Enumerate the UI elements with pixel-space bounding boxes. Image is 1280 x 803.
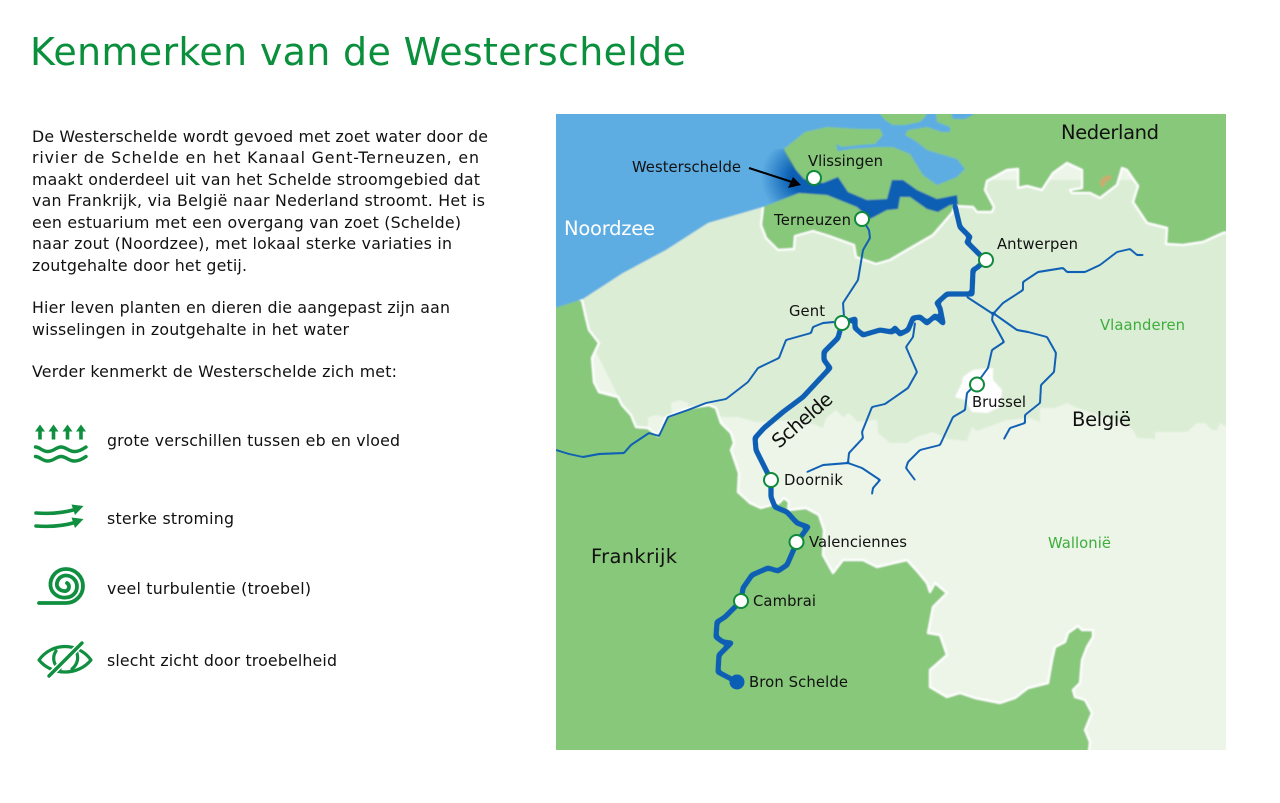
label: België: België <box>1072 408 1131 431</box>
label: Valenciennes: Valenciennes <box>809 534 907 551</box>
label: Schelde river: Schelde <box>767 388 837 453</box>
label: Antwerpen: Antwerpen <box>997 236 1078 253</box>
label: Terneuzen: Terneuzen <box>773 212 851 229</box>
marker: Gent <box>835 316 849 330</box>
marker: Bron Schelde <box>730 674 744 690</box>
label: Frankrijk: Frankrijk <box>591 545 678 568</box>
text block: list intro: Verder kenmerkt de Westerschelde zich met: <box>32 362 397 381</box>
label: current: sterke stroming <box>107 509 234 528</box>
text block: introduction: rivier de Schelde en het Kanaal Gent-Terneuzen, en <box>32 148 479 167</box>
text block: introduction: van Frankrijk, via België naar Nederland stroomt. Het is <box>32 191 485 210</box>
title: Kenmerken van de Westerschelde <box>30 30 686 74</box>
text block: introduction: maakt onderdeel uit van het Schelde stroomgebied dat <box>32 170 480 189</box>
text block: introduction: een estuarium met een overgang van zoet (Schelde) <box>32 213 461 232</box>
label: Doornik: Doornik <box>784 472 843 489</box>
map panel <box>556 114 1226 750</box>
icon: turbulence spiral <box>39 569 83 603</box>
estuary mouth gradient <box>764 149 800 202</box>
label: Bron Schelde: Bron Schelde <box>749 674 848 691</box>
marker: Valenciennes <box>790 535 804 549</box>
label: turbulence: veel turbulentie (troebel) <box>107 579 311 598</box>
icon: strong current <box>36 504 84 528</box>
text block: introduction: naar zout (Noordzee), met lokaal sterke variaties in <box>32 234 452 253</box>
label: poor visibility: slecht zicht door troebelheid <box>107 651 337 670</box>
label: Westerschelde: Westerschelde <box>632 159 741 176</box>
marker: Vlissingen <box>807 171 821 185</box>
river: Schelde <box>716 206 985 682</box>
thin rivers <box>556 219 1143 494</box>
label: Nederland: Nederland <box>1061 121 1159 144</box>
region: Frankrijk <box>556 298 1094 750</box>
sea: small inlet top <box>950 114 974 120</box>
text block: introduction: zoutgehalte door het getij. <box>32 256 247 275</box>
tan spot <box>1099 175 1112 188</box>
label: Cambrai: Cambrai <box>753 593 816 610</box>
icon: crossed-out eye <box>39 643 91 676</box>
text block: introduction: De Westerschelde wordt gevoed met zoet water door de <box>32 127 488 146</box>
marker: Doornik <box>764 473 778 487</box>
Wallonia patches <box>648 400 688 432</box>
Brussels urban area <box>955 368 1002 413</box>
marker: Antwerpen <box>979 253 993 267</box>
text block: introduction <box>32 127 488 275</box>
marker: Cambrai <box>734 594 748 608</box>
icon: tide arrows and waves <box>35 424 86 461</box>
label: tide: grote verschillen tussen eb en vloed <box>107 431 400 450</box>
text block: plants and animals: wisselingen in zoutgehalte in het water <box>32 320 350 339</box>
text block: plants and animals <box>32 298 450 339</box>
land and water base <box>556 114 1226 750</box>
label: Vlissingen: Vlissingen <box>808 153 883 170</box>
estuary: Westerschelde <box>796 170 958 219</box>
marker: Brussel <box>970 378 984 392</box>
text block: plants and animals: Hier leven planten en dieren die aangepast zijn aan <box>32 298 450 317</box>
label: Gent: Gent <box>789 303 825 320</box>
label: Brussel: Brussel <box>972 394 1026 411</box>
sea: Noordzee <box>556 114 966 309</box>
arrow: Westerschelde pointer <box>749 168 801 188</box>
region: Vlaanderen <box>570 180 1240 443</box>
label: Noordzee: Noordzee <box>564 217 655 240</box>
region: Nederland <box>760 114 1226 266</box>
label: Wallonië: Wallonië <box>1048 535 1111 552</box>
marker: Terneuzen <box>855 212 869 226</box>
label: Vlaanderen: Vlaanderen <box>1100 317 1185 334</box>
